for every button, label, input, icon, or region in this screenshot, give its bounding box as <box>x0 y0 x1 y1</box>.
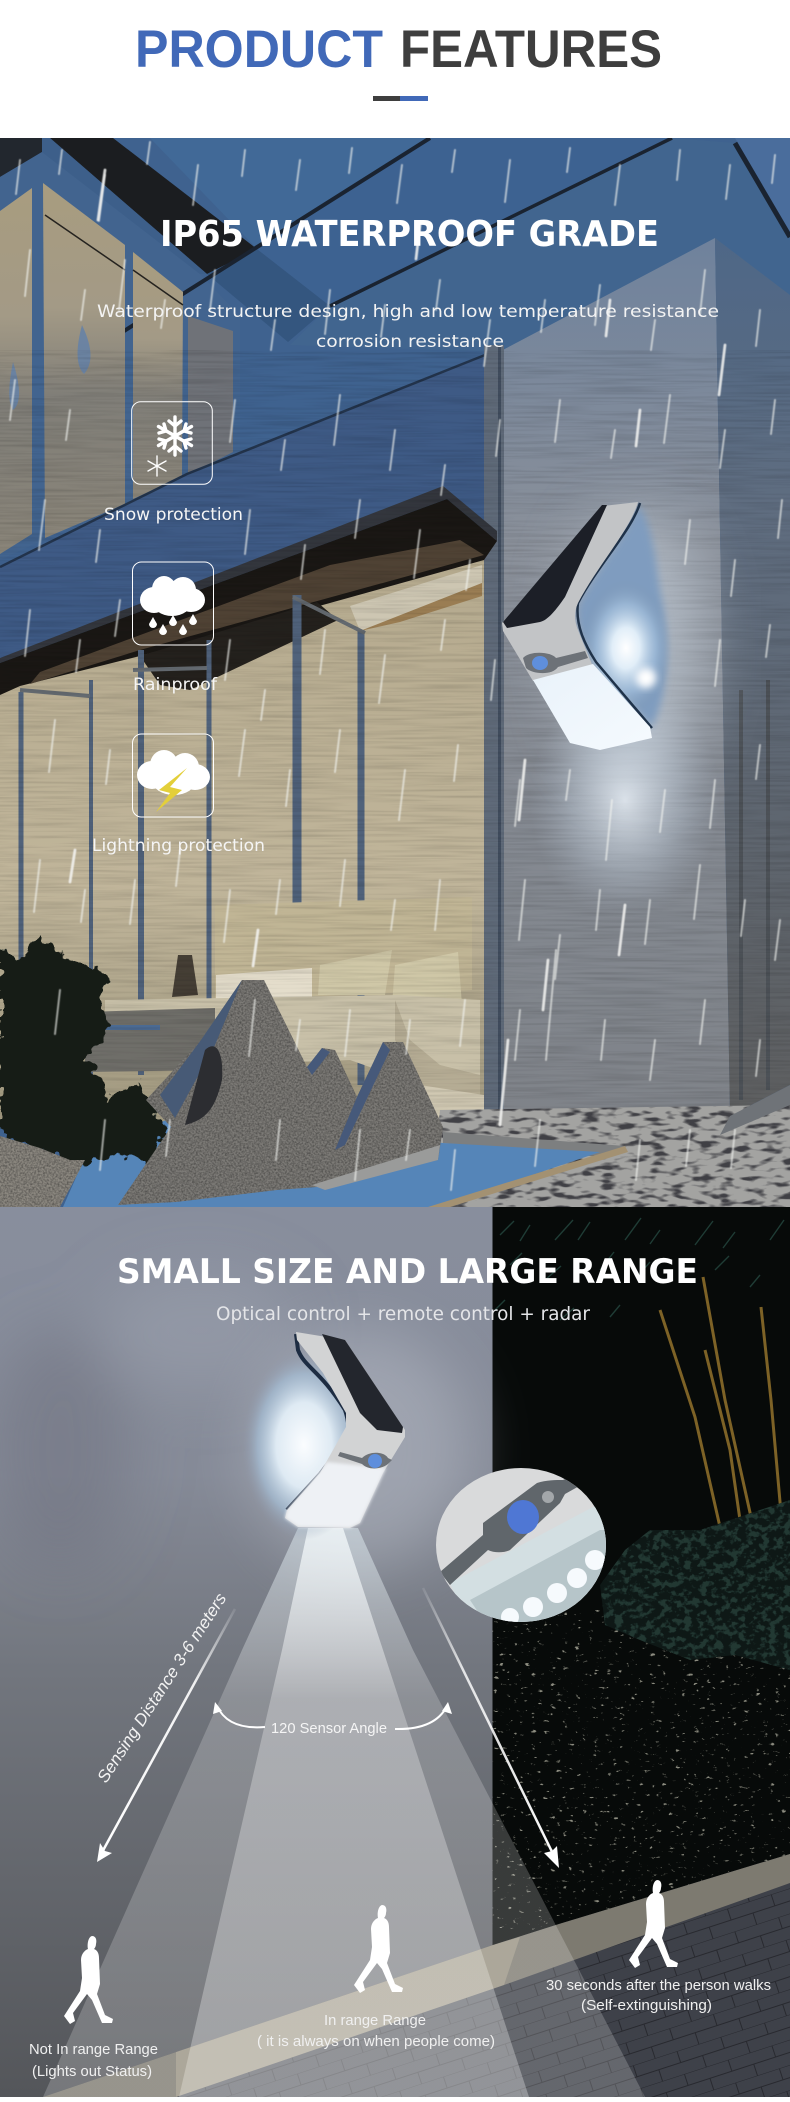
angle arcs <box>217 1706 447 1729</box>
right range arrow <box>423 1588 559 1868</box>
wall light fall-off <box>542 720 708 903</box>
description text: Waterproof structure design, high and low temperature resistance <box>97 302 719 322</box>
right wall <box>499 238 730 1113</box>
feature: snow protection <box>104 402 243 525</box>
blue wall band <box>0 349 500 658</box>
description text <box>97 302 719 352</box>
sensing distance label: Sensing Distance 3-6 meters <box>93 1589 231 1786</box>
canopy beam <box>350 565 482 631</box>
lamp silver body <box>502 502 638 681</box>
eave <box>0 486 497 663</box>
section glow on lamp <box>248 1362 346 1536</box>
sensor strap <box>441 1479 577 1585</box>
header: product features <box>135 20 662 101</box>
angle arrowheads <box>213 1702 452 1714</box>
lamp blue glow <box>577 504 667 728</box>
solar panel <box>503 505 607 628</box>
person: walked away <box>629 1880 678 1968</box>
siding texture <box>0 350 790 1120</box>
title underline <box>373 96 428 101</box>
wall lamp product large <box>29 1332 771 2080</box>
sensor angle label: 120 Sensor Angle <box>271 1720 387 1737</box>
gray wall <box>0 1207 492 2097</box>
walkway <box>43 1854 790 2097</box>
power button <box>542 1491 554 1503</box>
label: Lightning protection <box>92 836 265 856</box>
wall cloud shading <box>0 1294 266 1532</box>
lamp silver body <box>285 1332 405 1528</box>
title <box>135 20 662 79</box>
feature: rainproof <box>132 562 218 695</box>
description text: corrosion resistance <box>316 332 504 352</box>
ground and pebbles <box>430 1105 790 1207</box>
person: in range <box>354 1905 403 1993</box>
caption: not in range: Not In range Range <box>29 2042 158 2058</box>
sensor close-up inset <box>436 1468 606 1622</box>
rain streaks <box>10 142 782 1190</box>
subheading: Optical control + remote control + radar <box>216 1303 590 1325</box>
room interior <box>0 520 484 1125</box>
label: Rainproof <box>133 675 218 695</box>
person: not in range <box>64 1936 113 2024</box>
bush <box>595 1495 790 1675</box>
icon: rain cloud <box>140 576 205 635</box>
panel: IP65 waterproof scene <box>0 138 790 1207</box>
building background <box>0 138 790 1207</box>
top left fascia <box>0 138 42 177</box>
solar panel <box>322 1334 403 1433</box>
title: PRODUCT <box>135 20 383 79</box>
caption: not in range <box>29 2042 158 2080</box>
bamboo stalks <box>660 1277 781 1527</box>
label: Snow protection <box>104 505 243 525</box>
title: FEATURES <box>400 20 662 79</box>
pendant lamps <box>9 325 90 410</box>
heading: IP65 waterproof grade: IP65 WATERPROOF GRADE <box>160 214 659 255</box>
mulch debris <box>492 1610 790 1930</box>
motion sensor lens <box>507 1500 539 1534</box>
caption: not in range: (Lights out Status) <box>32 2064 152 2080</box>
sensor band <box>338 1452 392 1468</box>
light beams <box>43 1528 645 2097</box>
heading: small size and large range: SMALL SIZE AND LARGE RANGE <box>117 1252 698 1292</box>
lamp dark edge <box>577 503 652 728</box>
pool water <box>63 1120 600 1207</box>
caption: in range: ( it is always on when people come) <box>257 2034 495 2050</box>
dark roof lines <box>125 138 790 333</box>
left range arrow <box>97 1609 235 1862</box>
caption: in range: In range Range <box>324 2013 426 2029</box>
lamp sensor band <box>523 651 588 673</box>
icon: snowflake <box>148 417 192 476</box>
LED beads <box>501 1550 605 1626</box>
LED housing <box>454 1506 606 1622</box>
lamp lower white shell <box>285 1462 386 1528</box>
feature: lightning protection <box>92 734 265 856</box>
wall lamp halo <box>565 510 705 780</box>
caption: self-extinguishing: 30 seconds after the person walks <box>546 1978 771 1994</box>
headboard and bed <box>85 900 484 1118</box>
curb highlight <box>176 1937 520 2097</box>
upper windows <box>0 183 233 554</box>
caption: in range <box>257 2013 495 2050</box>
arrows and annotations <box>93 1588 559 1868</box>
night garden background <box>492 1207 790 1945</box>
rocks <box>0 980 443 1207</box>
caption: self-extinguishing <box>546 1978 771 2014</box>
panel: small size and large range <box>0 1207 790 2097</box>
wall glow behind lamp <box>250 1330 470 1570</box>
lamp dark edge <box>287 1334 348 1510</box>
icon: lightning cloud <box>137 750 210 812</box>
caption: self-extinguishing: (Self-extinguishing) <box>581 1998 712 2014</box>
wall lamp product <box>502 502 672 750</box>
right door frame <box>741 680 768 1100</box>
window mullions <box>20 595 365 1085</box>
LED panel <box>533 664 652 750</box>
bamboo leaves <box>495 1218 784 1320</box>
tree <box>0 935 165 1165</box>
